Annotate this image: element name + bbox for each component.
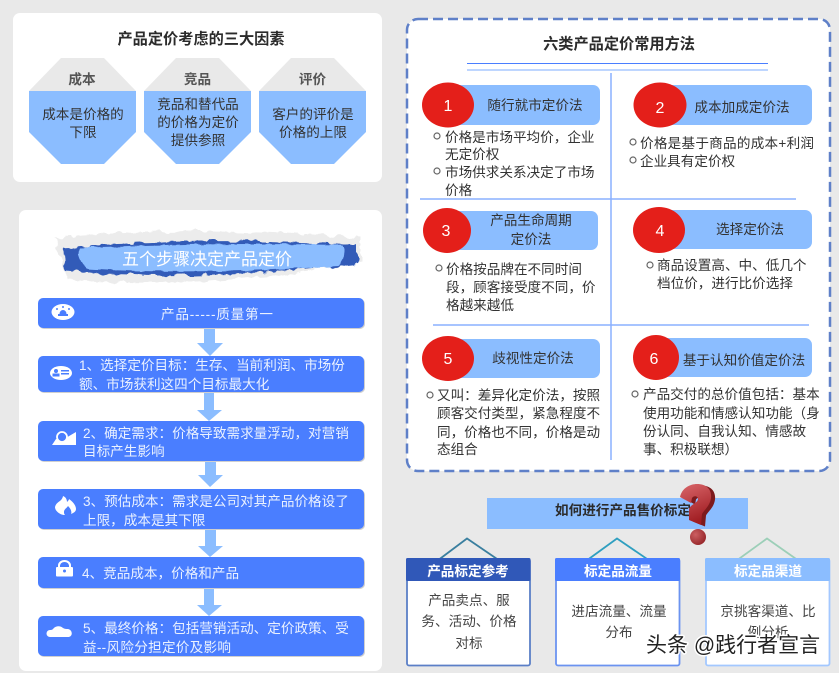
method 3: product life cycle: 段，顾客接受度不同，价 [446,279,596,295]
method 5: discriminatory pricing: 歧视性定价法 [492,351,574,366]
factor card: competitors: 的价格为定价 [157,115,239,130]
factor card: cost: 下限 [69,125,97,140]
factor card: reviews: 客户的评价是 [272,106,354,122]
card: store traffic: 进店流量、流量 [571,604,667,619]
method 4: choice pricing [633,207,812,291]
step bar: demand: 2、确定需求：价格导致需求量浮动，对营销 [83,426,349,441]
card: channels: 例分析 [748,625,788,640]
step bar: pricing goal: 1、选择定价目标：生存、当前利润、市场份 [79,357,345,373]
step bar: demand [38,421,365,462]
card: channels [705,538,830,666]
factor card: cost: 成本 [68,71,96,87]
icon: red question mark [680,484,715,545]
banner: how to set price: 如何进行产品售价标定 [555,502,691,518]
method 5: discriminatory pricing: 顾客交付类型，紧急程度不 [437,405,601,421]
method 1: follow-the-market: 1 [444,98,453,115]
method 2: cost-plus: 2 [656,100,665,117]
step bar: competitors [38,557,365,589]
arrow: step 1 to step 2 [197,392,222,421]
method 4: choice pricing: 4 [656,223,665,240]
card: store traffic: 标定品流量 [584,563,652,579]
method 6: perceived value [632,335,820,457]
card: product benchmark: 产品卖点、服 [428,593,510,608]
step bar: cost: 3、预估成本：需求是公司对其产品价格设了 [83,494,349,509]
method 5: discriminatory pricing: 同，价格也不同，价格是动 [437,425,600,440]
method 5: discriminatory pricing: 又叫：差异化定价法，按照 [437,388,600,403]
card: channels: 京挑客渠道、比 [720,603,816,619]
step bar: competitors: 4、竞品成本，价格和产品 [82,565,239,581]
step bar: final price: 5、最终价格：包括营销活动、定价政策、受 [83,620,349,636]
method 2: cost-plus: 成本加成定价法 [694,100,790,115]
method 3: product life cycle: 定价法 [511,232,551,247]
factor card: cost: 成本是价格的 [42,107,124,122]
method 2: cost-plus: 价格是基于商品的成本+利润 [640,135,814,151]
arrow: product to step 1 [197,328,223,356]
method 3: product life cycle: 格越来越低 [446,298,514,313]
heading ribbon: five steps [54,231,361,283]
factor card: reviews: 价格的上限 [279,125,347,140]
card: product benchmark [406,538,530,666]
arrow: step 4 to step 5 [197,589,222,616]
factor card: cost [29,58,136,164]
arrow: step 2 to step 3 [198,461,223,487]
method 3: product life cycle [423,208,598,313]
heading ribbon: five steps: 五个步骤决定产品定价 [122,250,292,269]
step bar: product quality: 产品-----质量第一 [161,306,273,322]
panel: six pricing methods [407,19,830,471]
card: product benchmark: 产品标定参考 [427,563,509,579]
card: product benchmark: 务、活动、价格 [421,614,517,629]
step bar: final price [38,616,365,657]
icon: badge [52,304,74,320]
heading: six methods: 六类产品定价常用方法 [543,35,695,53]
step bar: final price: 益--风险分担定价及影响 [83,640,231,655]
method 4: choice pricing: 选择定价法 [716,222,784,237]
icon: goal card [50,366,72,380]
method 3: product life cycle: 3 [442,223,451,240]
factor card: reviews: 评价 [299,72,326,87]
method 1: follow-the-market [422,82,600,198]
banner: how to set price [487,498,748,529]
method 6: perceived value: 份认同、自我认知、情感故 [643,423,807,439]
method 6: perceived value: 事、积极联想） [643,442,738,457]
card: store traffic [555,538,680,666]
step bar: cost: 上限，成本是其下限 [83,513,206,528]
icon: lock [56,561,73,576]
method 1: follow-the-market: 价格 [445,183,473,198]
step bar: product quality [38,298,365,329]
step bar: demand: 目标产生影响 [83,444,165,459]
method 1: follow-the-market: 价格是市场平均价，企业 [445,129,595,145]
method 6: perceived value: 基于认知价值定价法 [683,352,805,368]
watermark: 头条 @践行者宣言 [646,634,820,657]
card: channels: 标定品渠道 [734,563,802,579]
card: product benchmark: 对标 [455,636,483,651]
factor card: competitors: 竞品和替代品 [157,96,239,112]
method 3: product life cycle: 产品生命周期 [490,212,572,228]
method 6: perceived value: 6 [650,351,659,368]
card: store traffic: 分布 [605,625,633,640]
step bar: pricing goal [38,356,365,393]
step bar: pricing goal: 额、市场获利这四个目标最大化 [79,376,270,392]
method 2: cost-plus [630,82,814,169]
section: product price setting [406,484,830,666]
method 5: discriminatory pricing: 态组合 [437,442,478,457]
icon: cloud [47,626,72,637]
method 6: perceived value: 产品交付的总价值包括：基本 [643,386,820,402]
icon: hand and gear [52,432,76,445]
factor card: reviews [259,58,366,164]
method 4: choice pricing: 商品设置高、中、低几个 [657,257,807,273]
method 1: follow-the-market: 市场供求关系决定了市场 [445,164,595,180]
factor card: competitors: 竞品 [184,71,211,87]
arrow: step 3 to step 4 [198,529,223,557]
method 2: cost-plus: 企业具有定价权 [640,153,736,169]
factor card: competitors: 提供参照 [171,132,225,148]
step bar: cost [38,489,365,530]
method 5: discriminatory pricing [422,336,601,457]
heading: three factors: 产品定价考虑的三大因素 [117,30,285,48]
panel: three pricing factors [13,13,382,182]
icon: flame [55,496,76,515]
panel: five steps [19,210,382,671]
factor card: competitors [144,58,251,164]
method 3: product life cycle: 价格按品牌在不同时间 [446,261,582,277]
method 1: follow-the-market: 随行就市定价法 [487,97,583,113]
method 1: follow-the-market: 无定价权 [445,146,500,162]
method 4: choice pricing: 档位价，进行比价选择 [657,276,793,291]
method 5: discriminatory pricing: 5 [444,351,453,368]
method 6: perceived value: 使用功能和情感认知功能（身 [643,405,820,421]
